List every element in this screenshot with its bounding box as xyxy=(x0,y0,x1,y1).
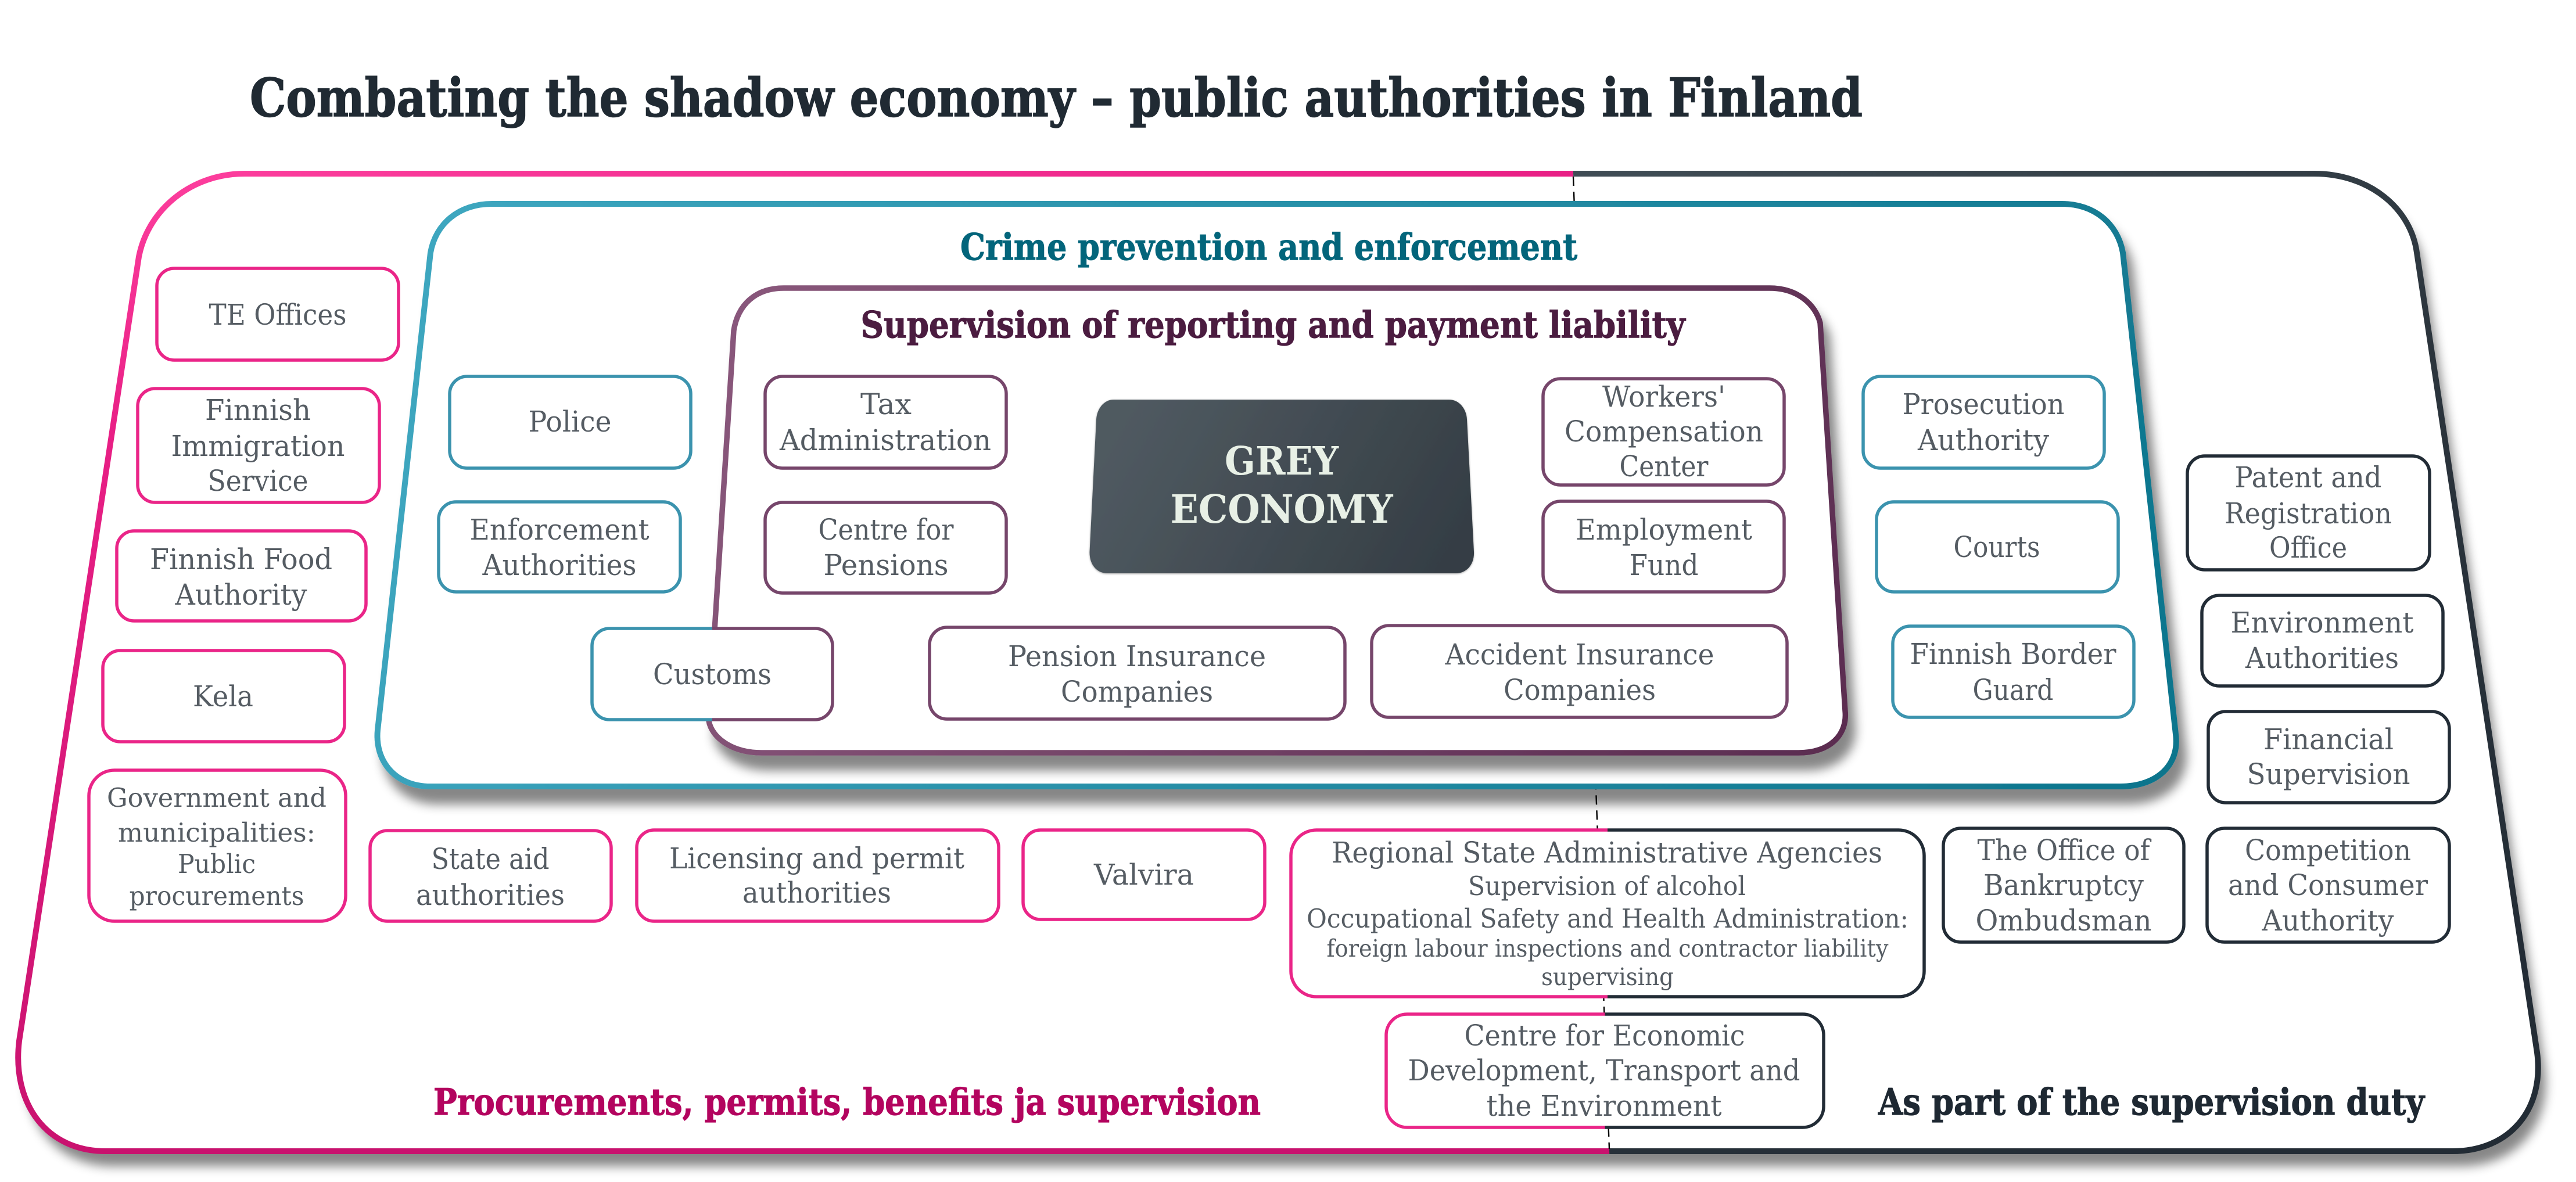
box: Licensing and permit authorities xyxy=(637,830,999,921)
box: Financial Supervision xyxy=(2208,712,2449,803)
centre box: grey economy: GREY xyxy=(1225,438,1339,484)
box: Regional State Administrative Agencies: supervising xyxy=(1541,963,1674,991)
box: Competition and Consumer Authority: Competition xyxy=(2245,833,2411,867)
centre box: grey economy: ECONOMY xyxy=(1170,486,1394,532)
box: TE Offices xyxy=(157,268,399,360)
title: Combating the shadow economy – public authorities in Finland xyxy=(250,67,1863,129)
box: Pension Insurance Companies: Pension Insurance xyxy=(1008,639,1266,673)
box: Competition and Consumer Authority: Authority xyxy=(2262,904,2394,937)
box: Environment Authorities xyxy=(2202,595,2443,686)
box: Workers' Compensation Center: Center xyxy=(1620,450,1709,483)
box: Government and municipalities xyxy=(89,770,346,921)
box: Finnish Border Guard xyxy=(1893,626,2134,717)
box: Finnish Food Authority: Authority xyxy=(175,578,307,612)
box: Environment Authorities: Authorities xyxy=(2245,641,2399,675)
box: Accident Insurance Companies xyxy=(1372,626,1787,717)
heading: supervision: Supervision of reporting and payment liability xyxy=(861,303,1687,346)
box: Tax Administration: Administration xyxy=(779,423,991,457)
box: Enforcement Authorities xyxy=(439,502,680,592)
box: The Office of Bankruptcy Ombudsman: The Office of xyxy=(1978,833,2152,867)
box: Licensing and permit authorities: Licensing and permit xyxy=(669,842,964,875)
box: Employment Fund: Employment xyxy=(1576,513,1752,547)
dashed divider xyxy=(1573,177,1609,1149)
box: Government and municipalities: procurements xyxy=(129,881,304,911)
box: Regional State Administrative Agencies xyxy=(1291,830,1924,997)
box: Police xyxy=(450,376,691,468)
box: The Office of Bankruptcy Ombudsman: Bankruptcy xyxy=(1983,868,2144,902)
box: Competition and Consumer Authority: and Consumer xyxy=(2228,868,2428,902)
box: Tax Administration: Tax xyxy=(860,387,912,421)
box: Financial Supervision: Financial xyxy=(2263,723,2394,756)
box: Pension Insurance Companies: Companies xyxy=(1061,675,1213,709)
box: Accident Insurance Companies: Accident Insurance xyxy=(1445,638,1714,671)
box: Finnish Immigration Service: Finnish xyxy=(205,393,311,427)
box: Centre for Economic Development: Centre for Economic xyxy=(1464,1019,1745,1052)
box: Patent and Registration Office: Patent and xyxy=(2234,461,2382,494)
heading: as part of the supervision duty: As part of the supervision duty xyxy=(1878,1080,2426,1123)
box: Finnish Border Guard: Guard xyxy=(1973,673,2053,707)
box: Police: Police xyxy=(529,405,611,439)
box: Centre for Pensions xyxy=(765,502,1006,593)
box: Finnish Food Authority: Finnish Food xyxy=(150,543,332,576)
box: Finnish Immigration Service: Service xyxy=(208,464,308,498)
box: Regional State Administrative Agencies: Occupational Safety and Health Administration: xyxy=(1307,903,1908,934)
box: Employment Fund xyxy=(1543,501,1784,592)
box: Enforcement Authorities: Enforcement xyxy=(469,513,650,547)
box: State aid authorities xyxy=(370,831,611,921)
box: Workers' Compensation Center: Compensation xyxy=(1565,415,1763,448)
box: Valvira xyxy=(1023,830,1265,919)
box: Valvira: Valvira xyxy=(1093,858,1194,892)
box: Kela xyxy=(103,651,345,742)
box: Regional State Administrative Agencies: Regional State Administrative Agencies xyxy=(1332,836,1882,870)
box: Government and municipalities: Government and xyxy=(107,782,327,813)
box: Centre for Economic Development: Development, Transport and xyxy=(1408,1054,1800,1087)
box: The Office of Bankruptcy Ombudsman: Ombudsman xyxy=(1975,904,2152,937)
box: Patent and Registration Office: Registration xyxy=(2225,497,2392,530)
box: Finnish Food Authority xyxy=(117,531,366,621)
box: State aid authorities: State aid xyxy=(431,842,550,876)
box: Centre for Pensions: Pensions xyxy=(824,548,948,582)
box: Courts: Courts xyxy=(1953,530,2040,564)
heading: crime prevention: Crime prevention and enforcement xyxy=(960,225,1577,268)
box: The Office of Bankruptcy Ombudsman xyxy=(1943,828,2184,942)
box: Customs: Customs xyxy=(653,658,772,691)
box: Prosecution Authority: Authority xyxy=(1917,423,2050,457)
box: Finnish Immigration Service: Immigration xyxy=(171,429,345,463)
box: Tax Administration xyxy=(765,376,1006,468)
box: Regional State Administrative Agencies: Supervision of alcohol xyxy=(1468,871,1746,901)
box: Accident Insurance Companies: Companies xyxy=(1504,673,1656,707)
box: State aid authorities: authorities xyxy=(416,878,565,912)
box: Employment Fund: Fund xyxy=(1629,548,1699,582)
box: Patent and Registration Office xyxy=(2187,456,2430,570)
box: Prosecution Authority: Prosecution xyxy=(1902,387,2065,421)
centre box: grey economy xyxy=(1089,400,1474,573)
box: Enforcement Authorities: Authorities xyxy=(482,548,637,582)
box: Centre for Pensions: Centre for xyxy=(818,513,954,547)
box: Centre for Economic Development xyxy=(1386,1014,1824,1127)
box: Environment Authorities: Environment xyxy=(2231,606,2413,639)
box: Customs xyxy=(592,628,833,720)
box: Financial Supervision: Supervision xyxy=(2247,757,2410,791)
box: Prosecution Authority xyxy=(1863,376,2104,468)
box: Workers' Compensation Center xyxy=(1543,379,1784,485)
box: Centre for Economic Development: the Environment xyxy=(1486,1089,1722,1123)
box: Courts xyxy=(1877,502,2118,592)
box: Workers' Compensation Center: Workers' xyxy=(1602,380,1725,414)
box: Patent and Registration Office: Office xyxy=(2269,531,2347,565)
box: Finnish Immigration Service xyxy=(138,389,379,502)
box: Competition and Consumer Authority xyxy=(2207,828,2449,942)
box: Regional State Administrative Agencies: foreign labour inspections and contractor liability xyxy=(1327,935,1889,962)
box: Licensing and permit authorities: authorities xyxy=(742,876,891,910)
box: Government and municipalities: municipalities: xyxy=(118,817,315,848)
heading: procurements, permits, benefits: Procurements, permits, benefits ja supervision xyxy=(433,1080,1261,1123)
box: Pension Insurance Companies xyxy=(930,627,1345,719)
box: Kela: Kela xyxy=(193,680,253,713)
box: Government and municipalities: Public xyxy=(178,849,256,879)
panel: supervision of reporting and payment liability xyxy=(709,288,1845,753)
box: TE Offices: TE Offices xyxy=(209,298,346,332)
box: Finnish Border Guard: Finnish Border xyxy=(1910,637,2116,671)
